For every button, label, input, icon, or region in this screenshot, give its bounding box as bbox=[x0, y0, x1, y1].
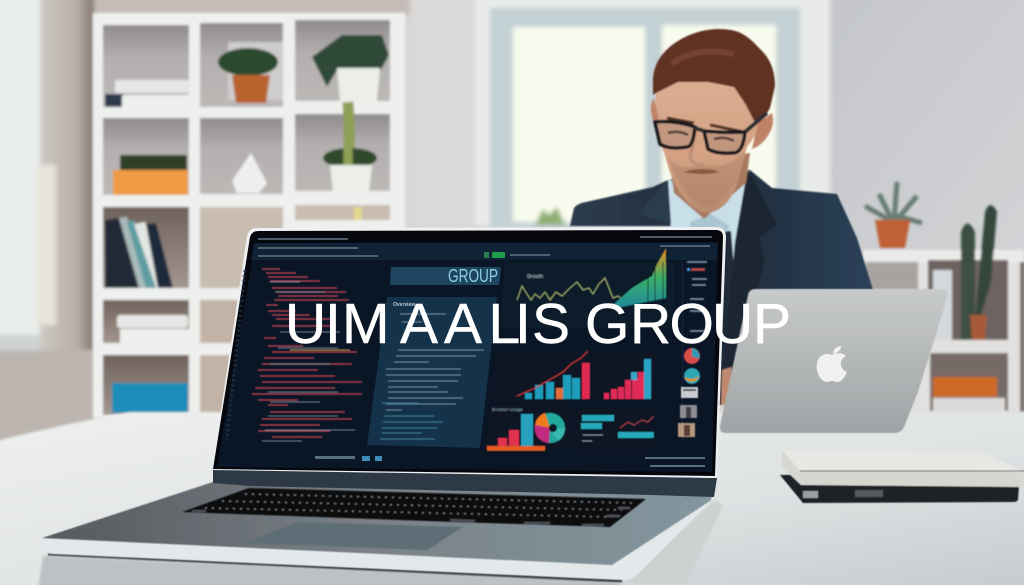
title: UIMAALIS GROUP: UIMAALIS GROUP bbox=[285, 292, 791, 356]
books top shelf bbox=[105, 80, 189, 107]
plant: terracotta pot bbox=[865, 182, 922, 248]
screen display bbox=[217, 236, 718, 472]
orange box with plant bbox=[113, 155, 188, 195]
right thumbnail column bbox=[678, 261, 707, 442]
beard shadow bbox=[668, 150, 745, 207]
brows and eyes bbox=[667, 118, 744, 132]
edge shadow bbox=[48, 554, 622, 581]
top surface bbox=[42, 482, 712, 565]
silver background laptop bbox=[720, 289, 948, 433]
plant: white pot middle bbox=[323, 102, 377, 220]
tie knot bbox=[690, 214, 730, 232]
man with glasses bbox=[570, 29, 873, 405]
apple logo icon bbox=[817, 346, 847, 382]
bottom bar and pie chart bbox=[484, 405, 572, 451]
screen display: Overview bbox=[393, 302, 415, 308]
top line and area chart bbox=[500, 248, 675, 328]
horizontal bars and mini line bbox=[573, 407, 655, 451]
small pie icons bbox=[684, 348, 700, 364]
main laptop bbox=[41, 227, 726, 581]
shirt bbox=[668, 171, 749, 281]
trackpad bbox=[244, 522, 463, 550]
plant: orange pot top bbox=[218, 48, 278, 103]
top line and area chart: Growth bbox=[527, 274, 543, 280]
ears bbox=[651, 98, 773, 149]
blue storage box bbox=[112, 383, 188, 413]
boxes on right shelf bbox=[933, 377, 997, 397]
bookshelf bbox=[93, 13, 405, 418]
code editor panel bbox=[227, 269, 362, 441]
sidebar legend bbox=[687, 261, 707, 332]
screen GROUP label: GROUP bbox=[448, 266, 498, 286]
front edge bbox=[41, 494, 714, 580]
book on right shelf bbox=[933, 270, 952, 340]
keyboard bbox=[182, 488, 646, 527]
toolbar bbox=[258, 236, 712, 257]
glasses bbox=[655, 122, 745, 153]
hair bbox=[653, 29, 775, 121]
suit bbox=[570, 170, 873, 405]
desk table bbox=[0, 412, 1024, 585]
hinge band bbox=[213, 468, 717, 497]
red and blue bar chart bbox=[492, 351, 590, 401]
taskbar bbox=[362, 456, 382, 461]
bottom bar and pie chart: Browser Usage bbox=[492, 407, 523, 412]
right shelf and plants bbox=[863, 182, 1024, 412]
laptop base bbox=[41, 482, 714, 581]
white geometric ornament bbox=[232, 153, 267, 193]
notebooks stack bbox=[780, 450, 1024, 503]
folded white stack bbox=[117, 315, 189, 343]
nose and mouth bbox=[690, 128, 704, 165]
neck and face bbox=[670, 153, 750, 219]
books second shelf bbox=[105, 217, 173, 288]
red bars chart right bbox=[592, 351, 658, 401]
thumbnail images bbox=[681, 387, 698, 398]
cactus plant bbox=[961, 205, 997, 340]
pie chart bbox=[535, 413, 565, 443]
plant: white pot top bbox=[312, 35, 389, 101]
screen bezel bbox=[212, 227, 726, 478]
hand bbox=[721, 367, 732, 405]
shelf compartments bbox=[103, 20, 390, 415]
middle report panel bbox=[390, 267, 501, 285]
lapel bbox=[725, 172, 777, 382]
